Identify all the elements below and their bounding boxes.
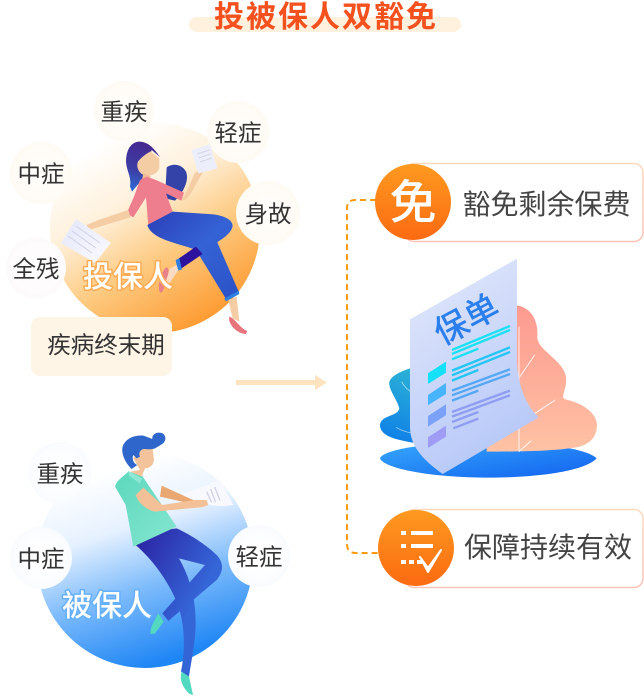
bubble: 重疾 [94,81,154,141]
bubble: 中症 [10,527,72,589]
card text: 豁免剩余保费 [462,189,631,220]
bubble: 中症: 中症 [18,546,64,572]
bubble: 全残 [6,238,66,298]
document sheet [410,259,539,474]
bubble: 中症: 中症 [18,161,64,187]
bubble: 重疾 [29,442,91,504]
illustration: policy document with trees [380,259,597,478]
bubble: 重疾: 重疾 [100,99,148,125]
bubble: 轻症 [228,525,290,587]
bubble: 身故: 身故 [244,201,292,227]
icon: 免 badge: 免 [390,176,436,229]
bush branches [396,382,417,433]
document lines [452,326,510,428]
icon: 免 badge [375,164,451,240]
illustration: woman with papers [87,142,247,334]
bubble: 轻症: 轻症 [214,120,262,146]
tree branches [519,327,555,452]
coral tree [487,306,597,452]
arrow [236,375,327,390]
label box: 疾病终末期: 疾病终末期 [47,332,165,358]
bubble: 身故 [236,181,300,245]
illustration: left document [61,219,111,263]
panel: insured [10,433,290,695]
title text: 投被保人双豁免 [214,1,438,34]
ground ellipse [380,442,597,478]
card text: 保障持续有效 [464,532,632,563]
bubble: 轻症 [207,101,269,163]
label: 被保人: 被保人 [62,590,152,623]
icon: checklist badge [378,510,454,586]
bubble: 全残: 全残 [12,256,60,282]
orange disc [50,123,260,333]
panel: policyholder [6,81,300,376]
label box: 疾病终末期 [31,317,172,376]
title [189,1,461,34]
card: waived premiums [375,164,643,242]
bubble: 轻症: 轻症 [236,544,282,570]
card outline [405,510,643,588]
label: 投保人: 投保人 [83,261,173,294]
card: coverage continues [378,510,643,588]
bubble: 中症 [10,142,72,204]
title highlight pill [189,17,461,32]
document heading: 保单 [428,288,506,353]
dashed connector [347,200,380,553]
blue bush [380,363,430,443]
document rows [428,362,446,448]
bubble: 重疾: 重疾 [36,461,84,487]
illustration: man with paper [115,433,233,695]
blue disc [37,452,253,668]
card outline [405,164,643,242]
